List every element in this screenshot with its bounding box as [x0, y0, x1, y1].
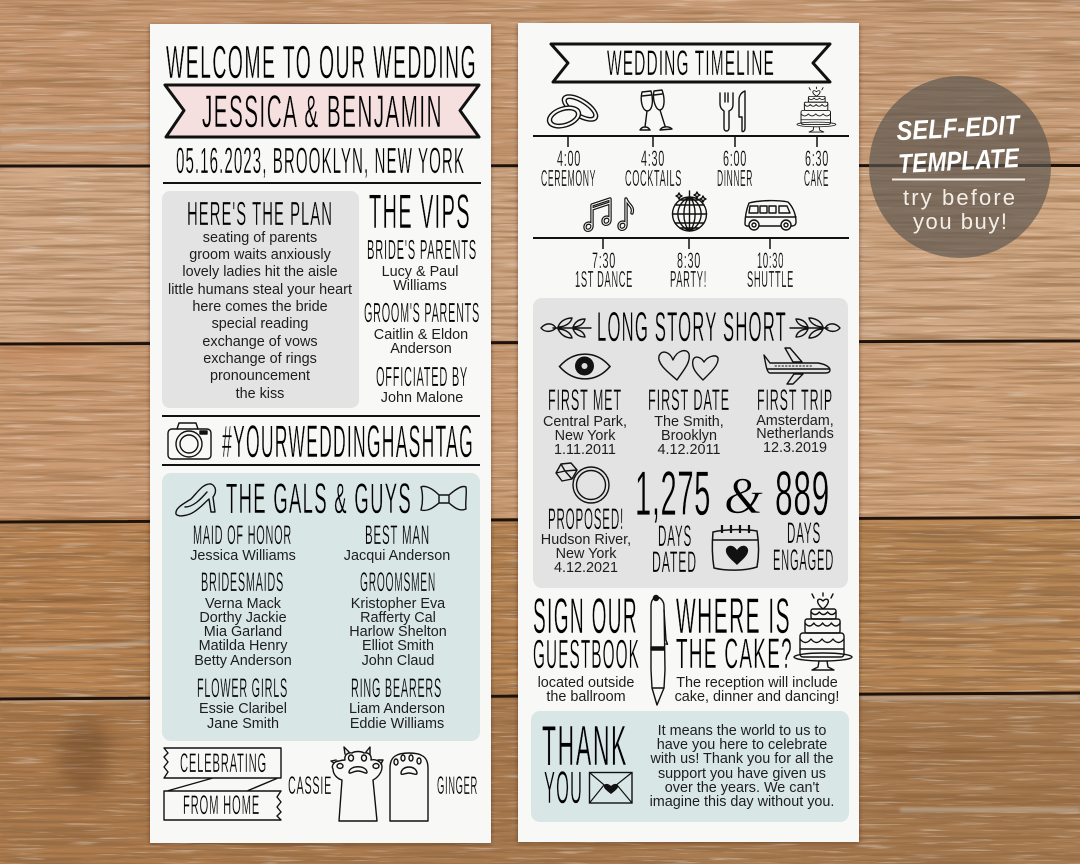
plan list: seating of parents — [203, 230, 317, 246]
panel: the vips — [364, 186, 480, 406]
thank you message: over the years. We can't — [665, 780, 819, 796]
plan list: special reading — [212, 316, 308, 332]
ring bearers: Liam Anderson — [349, 701, 445, 717]
4:30 cocktails — [625, 146, 682, 191]
guestbook block — [533, 588, 640, 705]
7:30 1st dance — [575, 248, 633, 292]
4:00 ceremony — [541, 146, 596, 191]
timeline banner: WEDDING TIMELINE — [607, 44, 775, 83]
groomsmen: Rafferty Cal — [360, 610, 436, 626]
ribbon: celebrating from home — [164, 748, 281, 820]
right program card — [518, 23, 859, 842]
guestbook block: the ballroom — [546, 689, 626, 705]
groom's parents: Caitlin & Eldon — [374, 327, 468, 343]
panel: the gals and guys: MAID OF HONOR — [193, 520, 292, 550]
groomsmen: Harlow Shelton — [349, 624, 447, 640]
first date: The Smith, — [654, 414, 724, 430]
thank you message: support you have given us — [658, 766, 826, 782]
stat: days engaged: 889 — [775, 459, 830, 529]
icon: disco ball — [672, 191, 706, 231]
plan list: exchange of rings — [203, 351, 317, 367]
groom's parents: Anderson — [390, 341, 452, 357]
first date: Brooklyn — [661, 428, 717, 444]
officiant: John Malone — [381, 390, 463, 406]
icon: music notes — [585, 199, 632, 230]
icon: wedding cake — [797, 87, 836, 132]
badge headline: TEMPLATE — [897, 143, 1021, 179]
panel: thank you — [531, 711, 849, 822]
flower girls: Jane Smith — [207, 716, 279, 732]
badge tagline — [903, 185, 1015, 234]
flower girls — [197, 673, 288, 732]
plan list: exchange of vows — [202, 334, 318, 350]
heading: thank you: YOU — [544, 762, 583, 813]
stat: days dated: DAYS — [658, 520, 692, 553]
left program card — [150, 24, 491, 843]
text: BRIDE'S PARENTS — [367, 234, 477, 265]
icon: envelope — [590, 772, 632, 803]
panel: long story short: PROPOSED! — [548, 503, 624, 536]
groomsmen — [349, 567, 447, 669]
timeline row one: COCKTAILS — [625, 165, 682, 191]
plan list: here comes the bride — [192, 299, 328, 315]
icon: left laurel — [541, 318, 591, 338]
first met — [543, 384, 627, 458]
heading: thank you — [542, 714, 628, 813]
bridesmaids: Mia Garland — [204, 624, 282, 640]
thank you message: with us! Thank you for all the — [650, 751, 833, 767]
first met: 1.11.2011 — [554, 442, 616, 458]
text: THE VIPS — [369, 186, 471, 239]
maid of honor — [190, 520, 296, 564]
cake block: WHERE IS — [676, 588, 791, 644]
proposed — [541, 503, 631, 576]
badge headline — [896, 110, 1024, 179]
maid of honor: Jessica Williams — [190, 548, 296, 564]
icon: right laurel — [790, 318, 840, 338]
proposed: Hudson River, — [541, 532, 631, 548]
timeline row two — [533, 191, 849, 292]
ampersand: & — [724, 468, 764, 525]
groomsmen: Elliot Smith — [362, 638, 434, 654]
names banner: JESSICA & BENJAMIN — [202, 86, 443, 137]
plan list: groom waits anxiously — [189, 247, 332, 263]
plan list: lovely ladies hit the aisle — [182, 264, 338, 280]
first trip: Netherlands — [756, 426, 834, 442]
names banner — [165, 85, 479, 137]
stat: days dated: DATED — [652, 546, 697, 579]
badge headline: SELF-EDIT — [896, 110, 1022, 146]
ribbon: celebrating from home: FROM HOME — [183, 790, 260, 820]
plan list — [168, 230, 352, 402]
bridesmaids: Verna Mack — [205, 596, 282, 612]
proposed: 4.12.2021 — [554, 560, 618, 576]
panel: long story short: FIRST MET — [548, 384, 622, 417]
thank you message — [650, 723, 834, 810]
cake block: cake, dinner and dancing! — [675, 689, 839, 705]
text: WELCOME TO OUR WEDDING — [166, 36, 477, 88]
icon: calendar heart — [712, 525, 758, 570]
right program card: ENGAGED — [773, 544, 834, 577]
6:00 dinner: 6:00 — [723, 146, 747, 171]
icon: pen — [651, 596, 668, 705]
icon: two hearts — [659, 351, 718, 380]
text: OFFICIATED BY — [376, 361, 468, 392]
panel: here's the plan: HERE'S THE PLAN — [187, 195, 333, 232]
text: #YOURWEDDINGHASHTAG — [222, 416, 474, 467]
panel: the gals and guys — [162, 473, 480, 741]
bride's parents: Williams — [393, 278, 447, 294]
first trip — [756, 384, 834, 456]
groom's parents — [364, 297, 480, 357]
first trip: 12.3.2019 — [763, 440, 827, 456]
icon: engagement ring — [556, 463, 609, 503]
6:00 dinner — [717, 146, 753, 191]
cake block: The reception will include — [676, 675, 838, 691]
10:30 shuttle: 10:30 — [757, 248, 784, 273]
timeline row two: PARTY! — [670, 266, 707, 292]
10:30 shuttle — [747, 248, 794, 292]
icon: shuttle bus — [745, 201, 796, 230]
first date — [648, 384, 730, 458]
plan list: pronouncement — [210, 368, 310, 384]
plan list: little humans steal your heart — [168, 282, 352, 298]
timeline row one — [533, 87, 849, 191]
panel: the gals and guys: FLOWER GIRLS — [197, 673, 288, 703]
cake block — [675, 588, 839, 705]
ring bearers — [349, 673, 445, 732]
badge: self-edit template — [869, 76, 1051, 258]
panel: long story short: FIRST DATE — [648, 384, 730, 417]
stat: days engaged: DAYS — [787, 517, 821, 550]
panel: the gals and guys: THE GALS & GUYS — [226, 475, 412, 523]
cake block: THE CAKE? — [676, 630, 793, 678]
timeline row two: 1ST DANCE — [575, 266, 633, 292]
panel: the gals and guys: GROOMSMEN — [360, 567, 436, 597]
panel: the gals and guys: RING BEARERS — [351, 673, 442, 703]
panel: long story short: LONG STORY SHORT — [597, 303, 787, 350]
plan list: the kiss — [236, 386, 284, 402]
timeline row two: SHUTTLE — [747, 266, 794, 292]
bridesmaids: Dorthy Jackie — [199, 610, 287, 626]
left program card: CELEBRATING — [180, 748, 267, 778]
icon: camera — [168, 423, 211, 459]
best man: BEST MAN — [365, 520, 430, 550]
4:00 ceremony: 4:00 — [557, 146, 581, 171]
panel: long story short — [533, 298, 848, 588]
guestbook block: located outside — [538, 675, 634, 691]
icon: dog paw ginger — [390, 753, 428, 821]
icon: bow tie — [421, 486, 466, 510]
thank you message: have you here to celebrate — [657, 737, 827, 753]
bride's parents — [367, 234, 477, 294]
flower girls: Essie Claribel — [199, 701, 287, 717]
best man: Jacqui Anderson — [344, 548, 450, 564]
timeline banner — [551, 44, 830, 83]
panel: the gals and guys: BRIDESMAIDS — [201, 567, 284, 597]
bridesmaids: Matilda Henry — [199, 638, 288, 654]
proposed: New York — [556, 546, 617, 562]
officiant — [376, 361, 468, 406]
groomsmen: Kristopher Eva — [351, 596, 445, 612]
badge tagline: you buy! — [913, 209, 1007, 234]
icon: high heel — [176, 484, 215, 516]
icon: fork and knife — [720, 91, 745, 132]
bride's parents: Lucy & Paul — [382, 264, 458, 280]
icon: airplane — [764, 348, 830, 384]
stat: days dated — [635, 459, 711, 579]
4:30 cocktails: 4:30 — [641, 146, 665, 171]
first date: 4.12.2011 — [658, 442, 720, 458]
icon: large wedding cake — [794, 593, 852, 670]
icon: cat paw cassie — [331, 747, 383, 821]
7:30 1st dance: 7:30 — [592, 248, 616, 273]
right program card: GUESTBOOK — [533, 631, 640, 677]
text: GINGER — [437, 772, 478, 800]
bridesmaids: Betty Anderson — [194, 653, 292, 669]
best man — [344, 520, 450, 564]
8:30 party — [670, 248, 707, 292]
6:30 cake — [804, 146, 829, 191]
timeline row one: CAKE — [804, 165, 829, 191]
first met: Central Park, — [543, 414, 627, 430]
thank you message: imagine this day without you. — [650, 794, 834, 810]
icon: champagne flutes — [640, 90, 672, 130]
stat: days engaged — [773, 459, 834, 577]
groomsmen: John Claud — [362, 653, 434, 669]
first trip: Amsterdam, — [756, 413, 834, 429]
badge tagline: try before — [903, 185, 1015, 210]
panel: thank you: THANK — [542, 714, 628, 778]
left program card: CASSIE — [288, 772, 332, 800]
right program card: FIRST TRIP — [757, 384, 833, 417]
icon: rings — [545, 90, 602, 132]
8:30 party: 8:30 — [677, 248, 701, 273]
thank you message: It means the world to us to — [658, 723, 826, 739]
timeline row one: 6:30 — [805, 146, 829, 171]
ring bearers: Eddie Williams — [350, 716, 444, 732]
text: 05.16.2023, BROOKLYN, NEW YORK — [176, 140, 465, 181]
right program card: SIGN OUR — [533, 588, 638, 644]
timeline row one: CEREMONY — [541, 165, 596, 191]
bridesmaids — [194, 567, 292, 669]
panel: long story short: 1,275 — [635, 459, 711, 529]
first met: New York — [555, 428, 616, 444]
icon: eye — [560, 354, 610, 379]
text: GROOM'S PARENTS — [364, 297, 480, 328]
timeline row one: DINNER — [717, 165, 753, 191]
panel: here's the plan — [162, 191, 359, 408]
